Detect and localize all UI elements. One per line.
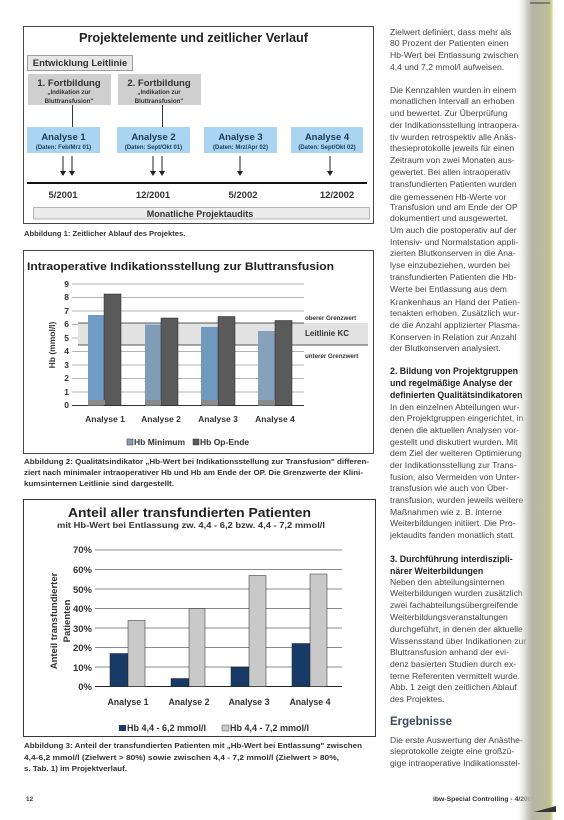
guideline labels: Leitlinie KC xyxy=(305,329,349,338)
paragraph: key figures: Krankenhaus an Hand der Patien- xyxy=(390,297,520,307)
gridlines and y axis labels xyxy=(73,545,342,693)
box: 2. Fortbildung: 2. Fortbildung xyxy=(127,78,191,89)
paragraph: key figures: die gemessenen Hb-Werte vor xyxy=(390,192,507,202)
paragraph: section 2: dem Ziel der weiteren Optimierung xyxy=(390,448,522,458)
paragraph: section 3: Neben den abteilungsinternen xyxy=(390,577,505,587)
box: Analyse 3: Analyse 3 xyxy=(218,132,263,143)
gridlines and y axis labels: 6 xyxy=(64,319,69,329)
box: Analyse 4: (Daten: Sept/Okt 02) xyxy=(298,145,356,151)
paragraph: section 2: Maßnahmen wie z. B. interne xyxy=(390,507,502,517)
paragraph: section 3 xyxy=(390,577,526,704)
timeline dates: 5/2001 xyxy=(48,190,78,201)
paragraph: key figures xyxy=(390,85,520,353)
box: Analyse 3: (Daten: Mrz/Apr 02) xyxy=(213,145,268,151)
category labels: Analyse 4 xyxy=(255,414,295,424)
gridlines and y axis labels: 2 xyxy=(64,373,69,383)
category labels: Analyse 3 xyxy=(198,414,238,424)
category labels: Analyse 2 xyxy=(141,414,181,424)
paragraph: target value: Zielwert definiert, dass mehr als xyxy=(390,27,511,37)
category labels xyxy=(107,697,331,707)
legend: Hb Op-Ende xyxy=(200,437,249,447)
paragraph: section 3: Wissensstand über Indikationen zur xyxy=(390,636,526,646)
paragraph: key figures: Um auch die postoperativ auf der xyxy=(390,225,517,235)
caption: figure 1: Abbildung 1: Zeitlicher Ablauf des Projektes. xyxy=(24,229,185,238)
paragraph: key figures: gewertet. Bei allen intraoperativ xyxy=(390,167,511,177)
paragraph: section 2: gestellt und diskutiert wurden. Mit xyxy=(390,437,518,447)
box: 1. Fortbildung: „Indikation zur xyxy=(47,89,91,96)
paragraph: key figures: transfundierten Patienten die Hb- xyxy=(390,272,516,282)
paragraph: target value: 80 Prozent der Patienten einen xyxy=(390,38,509,48)
panel: intraoperative chart xyxy=(24,250,374,454)
paragraph: section 2: In den einzelnen Abteilungen wur- xyxy=(390,402,520,412)
guideline labels: unterer Grenzwert xyxy=(305,353,358,360)
gridlines and y axis labels: 0% xyxy=(78,682,93,693)
paragraph: target value: 4,4 und 7,2 mmol/l aufweisen. xyxy=(390,62,504,72)
box: Analyse 4 xyxy=(291,127,363,153)
gridlines and y axis labels: 7 xyxy=(64,306,69,316)
paragraph: key figures: Zeitraum von zwei Monaten aus- xyxy=(390,155,515,165)
category labels: Analyse 1 xyxy=(107,697,149,707)
gridlines and y axis labels: 60% xyxy=(73,565,93,576)
box: Analyse 2 xyxy=(117,127,190,153)
paragraph: section 3: terne Referenten vermittelt wurde. xyxy=(390,671,520,681)
gridlines and y axis labels: 5 xyxy=(64,333,69,343)
footer: ibw-Special Controlling - 4/2002 xyxy=(433,796,536,803)
box: 2. Fortbildung xyxy=(118,74,201,105)
bar: Monatliche Projektaudits xyxy=(34,208,370,219)
paragraph: key figures: und bewertet. Zur Überprüfung xyxy=(390,108,508,118)
timeline dates: 12/2002 xyxy=(320,190,354,201)
paragraph: section 3: Bluttransfusion anhand der evi- xyxy=(390,647,509,657)
box: 1. Fortbildung: Bluttransfusion" xyxy=(45,98,93,105)
paragraph: section 2: transfusion wie auch von Über- xyxy=(390,483,509,493)
category labels: Analyse 3 xyxy=(228,697,270,707)
caption: figure 3: Abbildung 3: Anteil der transfundierten Patienten mit „Hb-Wert bei Entlassung" zwischen xyxy=(24,741,362,750)
paragraph: key figures: Transfusion und am Ende der OP xyxy=(390,202,518,212)
timeline dates xyxy=(48,190,354,201)
paragraph: section 3: Weiterbildungen wurden zusätzlich xyxy=(390,588,523,598)
box: Analyse 1: Analyse 1 xyxy=(41,132,86,143)
page number: 12 xyxy=(26,796,34,803)
paragraph: target value xyxy=(390,27,519,72)
paragraph: results: Die erste Auswertung der Anästhe- xyxy=(390,735,523,745)
legend: Hb 4,4 - 6,2 mmol/l xyxy=(127,723,206,733)
box: Analyse 4: Analyse 4 xyxy=(305,132,350,143)
heading: section 2: 2. Bildung von Projektgruppen xyxy=(390,366,518,376)
gridlines and y axis labels: 3 xyxy=(64,360,69,370)
caption: figure 2: ziert nach minimaler intraoperativer Hb und Hb am Ende der OP. Die Grenzwerte der Klini- xyxy=(24,468,363,477)
paragraph: key figures: lyse einzubeziehen, wurden bei xyxy=(390,260,510,270)
gridlines and y axis labels xyxy=(64,279,304,410)
paragraph: section 2: transfusion, wurden jeweils weitere xyxy=(390,495,523,505)
box: Analyse 1 xyxy=(27,127,100,153)
gridlines and y axis labels: 1 xyxy=(64,387,69,397)
paragraph: key figures: transfundierten Patienten wurden xyxy=(390,179,517,189)
gridlines and y axis labels: 9 xyxy=(64,279,69,289)
paragraph: key figures: tenakten erhoben. Zusätzlich wur- xyxy=(390,308,520,318)
gridlines and y axis labels: 8 xyxy=(64,292,69,302)
gridlines and y axis labels: 0 xyxy=(64,400,69,410)
box: Analyse 1: (Daten: Feb/Mrz 01) xyxy=(36,145,91,151)
heading: section 2: definierten Qualitätsindikatoren xyxy=(390,390,522,400)
box: Analyse 3 xyxy=(204,127,277,153)
paragraph: section 2: den Projektgruppen eingerichtet, in xyxy=(390,413,524,423)
legend xyxy=(127,437,249,447)
guideline labels xyxy=(305,315,358,360)
paragraph: key figures: der Indikationsstellung intraopera- xyxy=(390,120,520,130)
caption: figure 3: s. Tab. 1) im Projektverlauf. xyxy=(24,764,127,773)
paragraph: results xyxy=(390,735,523,768)
page fold shadow xyxy=(518,0,556,820)
paragraph: key figures: Werte bei Entlassung aus dem xyxy=(390,284,507,294)
panel: project timeline xyxy=(24,26,374,224)
axis title: Patienten xyxy=(62,599,73,642)
gridlines and y axis labels: 20% xyxy=(73,643,93,654)
timeline dates: 5/2002 xyxy=(228,190,258,201)
caption: figure 3 xyxy=(24,741,362,773)
bars xyxy=(88,294,292,406)
heading: section 3 xyxy=(390,554,513,576)
paragraph: section 2 xyxy=(389,402,524,540)
legend: Hb 4,4 - 7,2 mmol/l xyxy=(230,723,309,733)
paragraph: section 3: Weiterbildungsveranstaltungen xyxy=(390,612,508,622)
paragraph: section 2: jektaudits fanden monatlich statt. xyxy=(389,530,515,540)
heading: section 3: närer Weiterbildungen xyxy=(390,566,483,576)
heading: Ergebnisse: Ergebnisse xyxy=(390,716,452,728)
caption: figure 2: kumsinternen Leitlinie sind dargestellt. xyxy=(24,479,174,488)
axis title: Anteil transfundierter xyxy=(49,572,60,669)
paragraph: key figures: Intensiv- und Normalstation appli- xyxy=(390,237,518,247)
paragraph: key figures: der Blutkonserven analysiert. xyxy=(390,343,501,353)
caption: figure 2 xyxy=(24,457,369,488)
heading: section 2 xyxy=(390,366,522,400)
paragraph: key figures: Konserven in Relation zur Anzahl xyxy=(390,332,517,342)
axis title xyxy=(49,572,73,669)
bar: Monatliche Projektaudits: Monatliche Projektaudits xyxy=(147,209,253,219)
guideline labels: oberer Grenzwert xyxy=(305,315,356,322)
paragraph: section 2: denen die aktuellen Analysen vor- xyxy=(390,425,519,435)
gridlines and y axis labels: 30% xyxy=(73,624,93,635)
category labels xyxy=(85,414,295,424)
paragraph: section 2: der Indikationsstellung zur Trans- xyxy=(390,460,517,470)
subtitle: mit Hb-Wert bei Entlassung zw. 4,4 - 6,2 bzw. 4,4 - 7,2 mmol/l xyxy=(57,521,325,530)
paragraph: section 3: denz basierten Studien durch ex- xyxy=(390,659,516,669)
gridlines and y axis labels: 40% xyxy=(73,604,93,615)
box: Entwicklung Leitlinie: Entwicklung Leitlinie xyxy=(33,58,127,69)
arrows to timeline xyxy=(60,156,333,176)
paragraph: key figures: tiv wurden retrospektiv alle Anäs- xyxy=(390,132,516,142)
paragraph: section 3: des Projektes. xyxy=(390,694,444,704)
box: 2. Fortbildung: „Indikation zur xyxy=(137,89,181,96)
paragraph: results: gige intraoperative Indikationsstel- xyxy=(390,758,521,768)
box: Analyse 2: (Daten: Sept/Okt 01) xyxy=(125,145,182,151)
paragraph: section 3: zwei fachabteilungsübergreifende xyxy=(390,600,518,610)
gridlines and y axis labels: 50% xyxy=(73,585,93,596)
box: Entwicklung Leitlinie xyxy=(28,56,132,70)
category labels: Analyse 4 xyxy=(289,697,331,707)
heading: section 3: 3. Durchführung interdiszipli- xyxy=(390,554,513,564)
text column xyxy=(389,27,526,768)
paragraph: key figures: thesieprotokolle jeweils für einen xyxy=(390,143,514,153)
paragraph: section 2: Weiterbildungen initiiert. Die Pro- xyxy=(390,518,516,528)
heading: section 2: und regelmäßige Analyse der xyxy=(390,378,513,388)
heading: timeline title: Projektelemente und zeitlicher Verlauf xyxy=(79,30,309,45)
axis title: Hb (mmol/l) xyxy=(47,321,57,368)
bars xyxy=(110,574,327,686)
paragraph: section 3: Abb. 1 zeigt den zeitlichen Ablauf xyxy=(390,682,517,692)
caption: figure 2: Abbildung 2: Qualitätsindikator „Hb-Wert bei Indikationsstellung zur Transfusion" differen- xyxy=(24,457,369,466)
paragraph: key figures: zierten Blutkonserven in die Ana- xyxy=(390,248,516,258)
paragraph: results: sieprotokolle zeigte eine großzü- xyxy=(390,746,514,756)
box: Analyse 2: Analyse 2 xyxy=(131,132,176,143)
paragraph: section 2: fusion, also Vermeiden von Unter- xyxy=(390,472,520,482)
box: 1. Fortbildung xyxy=(28,74,111,105)
paragraph: key figures: dokumentiert und ausgewertet. xyxy=(390,213,508,223)
heading: chart title: Anteil aller transfundierten Patienten xyxy=(68,506,311,520)
timeline axis xyxy=(27,182,367,184)
paragraph: key figures: monatlichen Intervall an erhoben xyxy=(390,96,515,106)
caption: figure 3: 4,4-6,2 mmol/l (Zielwert > 80%) sowie zwischen 4,4 - 7,2 mmol/l (Zielwert > 80%, xyxy=(24,753,339,762)
guideline band xyxy=(78,323,368,345)
box: 1. Fortbildung: 1. Fortbildung xyxy=(37,78,101,89)
legend xyxy=(119,723,309,733)
legend: Hb Minimum xyxy=(134,437,185,447)
gridlines and y axis labels: 70% xyxy=(73,545,93,556)
paragraph: key figures: Die Kennzahlen wurden in einem xyxy=(390,85,516,95)
box: 2. Fortbildung: Bluttransfusion" xyxy=(135,98,183,105)
paragraph: target value: Hb-Wert bei Entlassung zwischen xyxy=(390,50,519,60)
heading: chart title: Intraoperative Indikationsstellung zur Bluttransfusion xyxy=(27,261,334,273)
category labels: Analyse 2 xyxy=(168,697,210,707)
timeline dates: 12/2001 xyxy=(136,190,171,201)
paragraph: section 3: durchgeführt, in denen der aktuelle xyxy=(390,624,523,634)
panel: transfused patients chart xyxy=(24,500,376,736)
gridlines and y axis labels: 4 xyxy=(64,346,69,356)
paragraph: key figures: de die Anzahl applizierter Plasma- xyxy=(390,320,520,330)
category labels: Analyse 1 xyxy=(85,414,125,424)
gridlines and y axis labels: 10% xyxy=(73,663,93,674)
